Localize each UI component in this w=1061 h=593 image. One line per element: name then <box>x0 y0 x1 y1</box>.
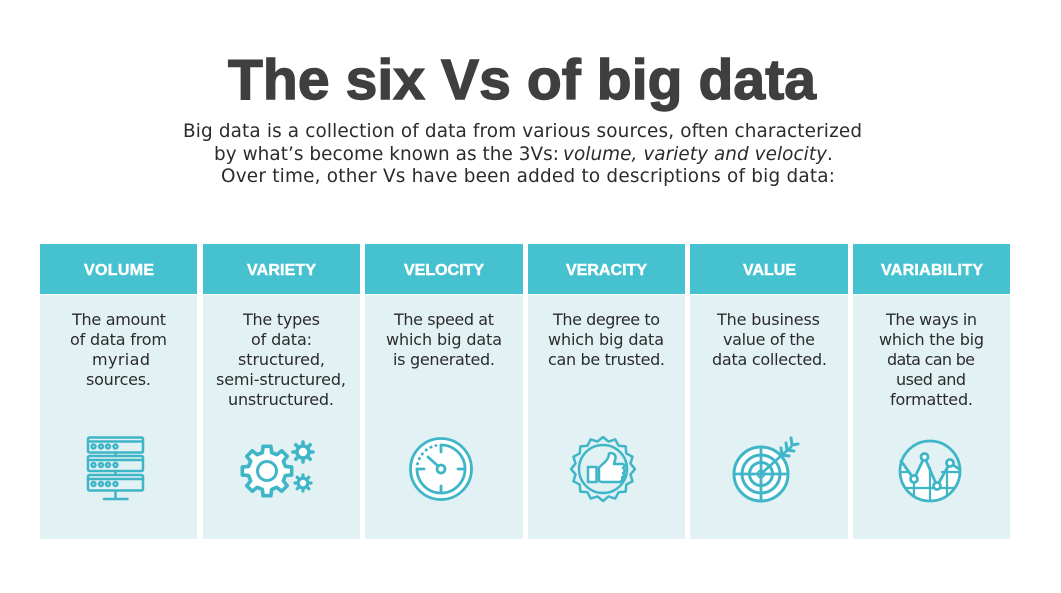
heading: variety <box>203 244 360 294</box>
text: veracity description: which big data <box>548 330 664 349</box>
text: veracity description <box>548 310 665 369</box>
text: variability description: The ways in <box>885 310 977 329</box>
heading: velocity <box>365 244 523 294</box>
panel: velocity <box>365 244 523 539</box>
text: variety description: of data: <box>251 330 312 349</box>
text: volume description: myriad <box>92 350 150 369</box>
heading: value: VALUE <box>743 262 796 279</box>
text: variety description: unstructured. <box>228 390 334 409</box>
text: veracity description: can be trusted. <box>548 350 665 369</box>
text: velocity description <box>386 310 502 369</box>
text: variability description <box>879 310 984 409</box>
text: variability description: formatted. <box>890 390 973 409</box>
heading: volume: VOLUME <box>84 262 154 279</box>
text: volume description: The amount <box>71 310 166 329</box>
text: variability description: data can be <box>887 350 975 369</box>
text: variety description: The types <box>242 310 320 329</box>
text: value description: value of the <box>723 330 815 349</box>
text: value description: The business <box>716 310 820 329</box>
subtitle text: by what’s become known as the 3Vs: <box>214 144 559 165</box>
subtitle text: Big data is a collection of data from various sources, often characterized <box>183 121 862 142</box>
heading: variability: VARIABILITY <box>881 262 983 279</box>
heading: veracity: VERACITY <box>566 262 647 279</box>
text: value description: data collected. <box>712 350 827 369</box>
icon: target with arrow <box>734 438 798 501</box>
panel: veracity <box>528 244 685 539</box>
panel: variability <box>853 244 1010 539</box>
panel: variety <box>203 244 360 539</box>
heading: variability <box>853 244 1010 294</box>
heading: volume <box>40 244 197 294</box>
text: volume description: of data from <box>70 330 167 349</box>
panel: value <box>690 244 848 539</box>
text: volume description: sources. <box>86 370 151 389</box>
subtitle text: . <box>827 144 833 165</box>
subtitle text <box>183 121 862 187</box>
text: velocity description: The speed at <box>393 310 494 329</box>
icon: server rack <box>88 438 143 499</box>
heading: variety: VARIETY <box>247 262 316 279</box>
title: The six Vs of big data <box>228 48 817 112</box>
text: variability description: which the big <box>879 330 984 349</box>
icon: line chart in circle <box>898 441 962 505</box>
text: variety description: semi-structured, <box>216 370 346 389</box>
heading: value <box>690 244 848 294</box>
subtitle text: volume, variety and velocity <box>563 144 828 165</box>
text: velocity description: is generated. <box>393 350 495 369</box>
heading: velocity: VELOCITY <box>404 262 484 279</box>
text: variety description <box>216 310 346 409</box>
subtitle text: Over time, other Vs have been added to descriptions of big data: <box>221 166 835 187</box>
icon: speedometer <box>410 438 472 500</box>
icon: thumbs-up badge <box>571 437 635 501</box>
text: value description <box>712 310 827 369</box>
heading: veracity <box>528 244 685 294</box>
text: veracity description: The degree to <box>552 310 660 329</box>
text: volume description <box>70 310 167 389</box>
icon: gears <box>242 442 313 496</box>
text: velocity description: which big data <box>386 330 502 349</box>
text: variety description: structured, <box>238 350 325 369</box>
text: variability description: used and <box>896 370 966 389</box>
panel: volume <box>40 244 197 539</box>
